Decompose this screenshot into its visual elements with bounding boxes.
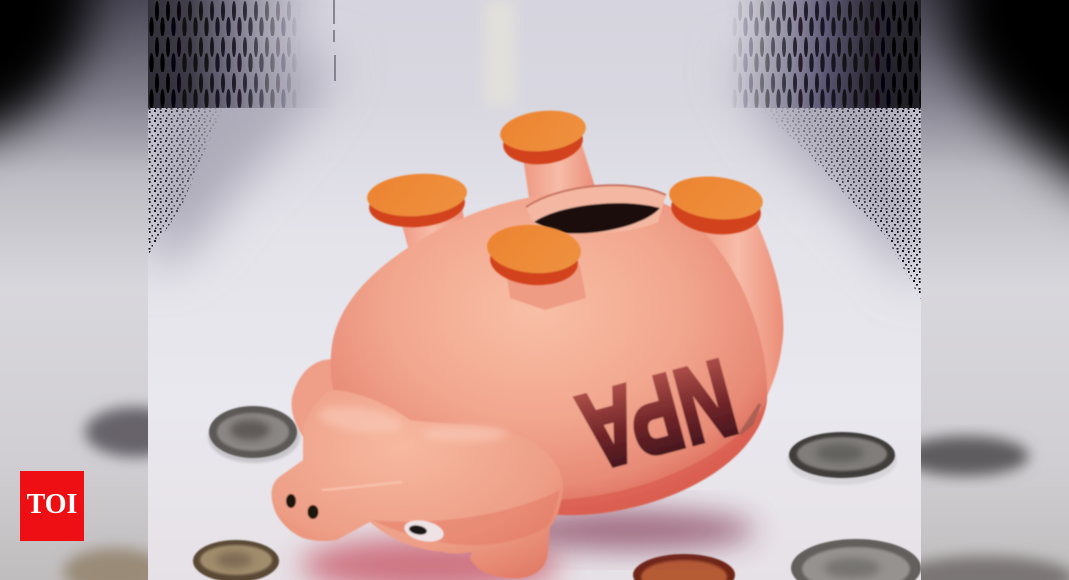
pig: main body	[331, 191, 767, 517]
coin on floor: bottom right	[791, 539, 921, 580]
coin slot	[526, 185, 666, 234]
pig: head	[271, 390, 563, 578]
top glow	[487, 2, 513, 100]
coin on floor: left	[208, 406, 300, 463]
pig: right leg	[702, 222, 784, 396]
pig: dark mark at body edge	[740, 404, 760, 434]
blurred left side panel	[0, 0, 148, 580]
piggy bank	[271, 145, 783, 578]
pig: rear bump behind snout	[290, 358, 334, 437]
orange foot: right	[668, 176, 764, 236]
pig: snout end	[286, 494, 318, 519]
TOI logo: TOI	[27, 489, 77, 520]
blurred right side panel	[921, 0, 1069, 580]
soft grey haze: right	[730, 60, 921, 290]
pig: front leg near slot	[506, 265, 586, 310]
TOI logo	[20, 471, 84, 541]
dark corner: top left	[148, 0, 340, 255]
pig: lower body shade	[555, 400, 767, 515]
coin on floor: bottom centre copper	[633, 554, 735, 580]
pig: head lower shade	[372, 490, 560, 545]
pig: top legs	[402, 208, 464, 248]
orange foot: centre	[485, 222, 583, 288]
red floor shadow	[300, 510, 755, 580]
pig: eye	[404, 520, 444, 542]
pig: head highlight	[318, 405, 400, 434]
soft grey haze: left	[148, 60, 340, 270]
coin on floor: right	[787, 432, 897, 485]
coin on floor: bottom left	[193, 540, 279, 580]
orange foot: left	[366, 171, 468, 230]
orange foot: top	[499, 110, 587, 166]
pig: snout ridge	[322, 482, 402, 490]
pig: neck highlight	[423, 426, 507, 442]
NPA lettering: NPA	[568, 337, 748, 493]
backdrop	[148, 0, 921, 580]
dark corner: top right	[725, 0, 921, 300]
central photo	[148, 0, 921, 580]
